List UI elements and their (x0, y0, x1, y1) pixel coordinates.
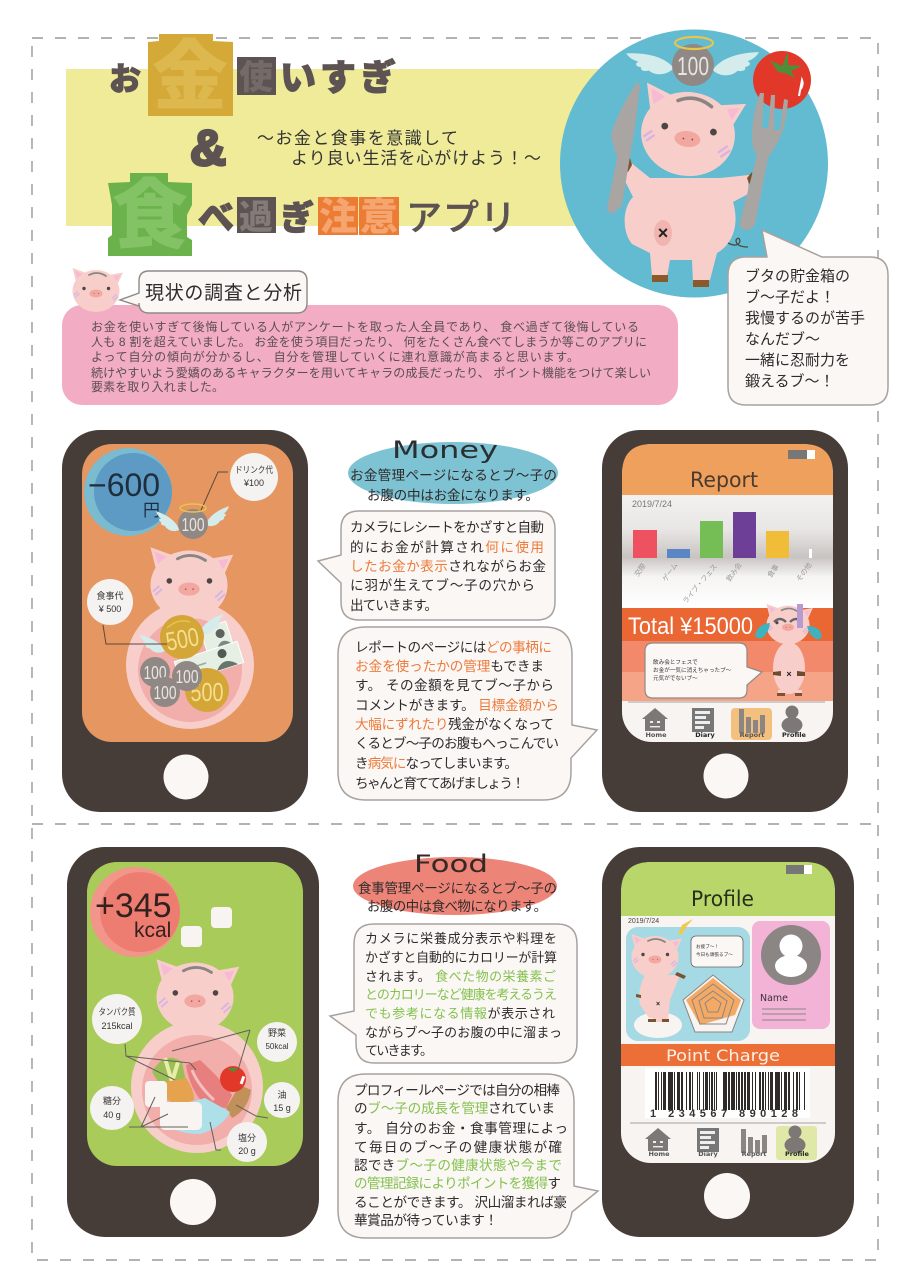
coins: 100 (144, 663, 166, 683)
bottom navigation: Home (645, 731, 667, 739)
pig comment bubble: お金が一気に消えちゃったブ〜 (653, 666, 732, 674)
callout: profile page: プロフィールページでは自分の相棒 (354, 1083, 560, 1098)
callout: sugar: 40 g (103, 1110, 121, 1120)
callout: drink: ¥100 (243, 478, 264, 488)
pig head (156, 959, 239, 1031)
pig comment bubble: 元気がでないブ〜 (653, 674, 698, 682)
title line 2: ぎ (280, 199, 314, 238)
speech bubble: mascot intro (728, 230, 888, 405)
crying pig: × (786, 669, 792, 679)
coins: 100 (154, 683, 176, 703)
title kanji: food: 食 (112, 174, 188, 259)
winged coin: 100 (677, 51, 709, 81)
counter: -600 yen: 円 (143, 496, 160, 521)
callout: profile page: す。 自分のお金・食事管理によっ (354, 1121, 568, 1136)
callout: food calculation (330, 924, 577, 1063)
subtitle: 〜お金と食事を意識して (257, 129, 458, 148)
callout: report page: コメントがきます。 目標金額から (355, 698, 559, 713)
callout: profile page: ることができます。 沢山溜まれば豪 (354, 1195, 567, 1210)
bar chart: ゲーム (660, 561, 680, 583)
callout: meal: 食事代 (96, 589, 124, 602)
food contents (145, 1058, 251, 1134)
bar chart: その他 (794, 561, 814, 583)
callout: report page: き病気になってしまいます。 (355, 756, 518, 771)
phone: profile screen (602, 847, 854, 1237)
winged coin: 100 (182, 515, 204, 535)
callout: profile page: 認できブ〜子の健康状態や今まで (354, 1157, 562, 1173)
title kanji: excess: 過 (239, 199, 273, 237)
banknotes (174, 621, 244, 683)
heading: Food: Food (414, 850, 488, 878)
callout: food calculation: でも参考になる情報が表示され (365, 1006, 555, 1021)
callout: food calculation: とのカロリーなど健康を考えるうえ (365, 987, 557, 1002)
title line 2: アプリ (406, 197, 516, 238)
callout: food calculation: カメラに栄養成分表示や料理を (365, 931, 557, 946)
winged coin (152, 504, 233, 539)
title line 2 (108, 173, 516, 259)
callout: protein (92, 994, 142, 1044)
phone: profile screen: 2019/7/24 (628, 918, 659, 925)
callout: profile page (338, 1074, 598, 1238)
mascot illustration: × (658, 223, 668, 243)
counter: +345 kcal (90, 867, 180, 957)
title kanji: use: 使 (239, 59, 273, 97)
bar chart (622, 495, 833, 608)
callout: drink (230, 453, 278, 501)
heading: Money: お腹の中はお金になります。 (367, 487, 539, 503)
heading: Money (348, 436, 558, 504)
speech bubble: mascot intro: 我慢するのが苦手 (745, 310, 865, 327)
barcode: 1 234567 890128 (650, 1108, 798, 1120)
callout: report page: ちゃんと育ててあげましょう！ (355, 776, 525, 791)
belly button (654, 220, 672, 246)
callout: vegetables (257, 1022, 297, 1062)
callout: sugar (90, 1086, 134, 1130)
callout: money calculation: カメラにレシートをかざすと自動 (350, 519, 544, 535)
bottom navigation: Profile (785, 1150, 810, 1158)
belly (131, 1021, 263, 1153)
pig feet (652, 275, 668, 282)
report header (622, 444, 833, 495)
bottom navigation: Report (742, 1150, 766, 1158)
counter: -600 yen: −600 (88, 467, 160, 503)
bar chart: 食事 (765, 563, 781, 579)
pig comment bubble (645, 643, 762, 698)
total band (622, 608, 833, 701)
bar chart: 交際 (632, 562, 648, 578)
knife (607, 82, 640, 213)
pig body (622, 162, 749, 283)
title kanji: money: 金 (152, 35, 228, 120)
bar chart: 2019/7/24 (632, 499, 672, 509)
hands (623, 158, 754, 184)
heading: Money: Money (392, 436, 498, 464)
profile header: Profile (691, 887, 754, 911)
barcode (645, 1068, 810, 1120)
heading: Food: お腹の中は食べ物になります。 (367, 898, 547, 914)
speech bubble: mascot intro: なんだブ〜 (745, 330, 820, 348)
bottom navigation: Diary (698, 1150, 718, 1158)
panel: analysis text: 要素を取り入れました。 (91, 380, 224, 394)
character panel: × (656, 1001, 660, 1008)
phone: food screen (67, 847, 319, 1237)
panel: analysis text: よって自分の傾向が分かるし、 自分を管理していくに連れ意識が高まると思います。 (91, 349, 579, 364)
character speech bubble (691, 936, 743, 967)
panel: analysis text: 続けやすいよう愛嬌のあるキャラクターを用いてキャラの成長だったり、 ポイント機能をつけて楽しい (91, 365, 651, 380)
point charge band (621, 1044, 835, 1066)
fork (740, 93, 788, 230)
callout: money calculation: したお金か表示されながらお金 (350, 559, 546, 574)
crying pig (755, 604, 822, 696)
title line 2: べ (198, 197, 234, 238)
counter: +345 kcal: kcal (134, 919, 171, 942)
callout: oil (264, 1082, 300, 1118)
callout: oil: 油 (277, 1088, 287, 1101)
bottom navigation (628, 702, 825, 740)
callout: salt: 塩分 (238, 1131, 256, 1144)
character speech bubble: お疲ブ〜！ (696, 943, 719, 950)
callout: money calculation: に羽が生えてブ〜子の穴から (350, 577, 535, 593)
winged coin (626, 37, 759, 86)
callout: vegetables: 野菜 (268, 1026, 286, 1039)
callout: money calculation: 出ていきます。 (350, 598, 438, 613)
callout: money calculation: 的にお金が計算され何に使用 (350, 539, 544, 555)
belly (126, 601, 254, 729)
subtitle (257, 129, 541, 168)
heading: Food: 食事管理ページになるとブ〜子の (358, 880, 557, 896)
callout: report page: す。 その金額を見てブ〜子から (355, 677, 554, 693)
bottom navigation: Report (740, 731, 764, 739)
leader lines (125, 1030, 268, 1150)
speech bubble: mascot intro: 鍛えるブ〜！ (745, 372, 835, 390)
speech bubble: mascot intro: ブ〜子だよ！ (745, 288, 835, 306)
callout: profile page: のブ〜子の成長を管理されていま (354, 1100, 555, 1116)
bottom navigation: Diary (695, 731, 715, 739)
callout: sugar: 糖分 (103, 1094, 121, 1107)
speech bubble: mascot intro: ブタの貯金箱の (745, 267, 850, 285)
callout: report page: お金を使ったかの管理もできま (355, 658, 544, 674)
coins (137, 614, 229, 712)
callout: drink: ドリンク代 (235, 463, 273, 476)
character speech bubble: 今日も頑張るブ〜 (696, 951, 733, 958)
leader line (103, 625, 167, 644)
bar chart: 飲み会 (724, 561, 744, 583)
pig comment bubble: 飲み会とフェスで (653, 658, 698, 666)
tail (728, 238, 748, 247)
point charge band: Point Charge (666, 1046, 780, 1065)
leader line (198, 472, 228, 517)
bar chart: ライブ・フェス (681, 562, 719, 605)
subtitle: より良い生活を心がけよう！〜 (291, 149, 541, 168)
speech bubble: mascot intro: 一緒に忍耐力を (745, 352, 850, 369)
callout: salt: 20 g (238, 1146, 256, 1156)
name card (752, 921, 830, 1029)
panel: analysis text: お金を使いすぎて後悔している人がアンケートを取った人全員であり、 食べ過ぎて後悔している (91, 319, 639, 334)
sugar cubes (181, 907, 232, 947)
panel: analysis text: 人も 8 割を超えていました。 お金を使う項目だったり、 何をたくさん食べてしまうか等このアプリに (91, 334, 647, 349)
icon: small pig (72, 268, 123, 312)
total band: Total ¥15000 (628, 613, 753, 640)
mascot illustration (560, 30, 828, 298)
callout: report page: くるとブ〜子のお腹もへっこんでい (355, 735, 559, 751)
name card: Name (760, 993, 788, 1004)
profile header (621, 862, 835, 916)
coins: 500 (163, 621, 201, 657)
callout: profile page: 華賞品が待っています！ (354, 1213, 498, 1228)
callout: report page: 大幅にずれたり残金がなくなって (355, 717, 554, 732)
yellow title band (66, 69, 606, 226)
callout: meal: ¥ 500 (98, 604, 121, 614)
blue circle (560, 30, 828, 298)
heading: Food (353, 850, 557, 915)
title line 1: お (109, 61, 141, 97)
bottom navigation: Home (648, 1150, 670, 1158)
heading: analysis: 現状の調査と分析 (145, 278, 302, 305)
callout: protein: タンパク質 (98, 1005, 136, 1018)
pig head (636, 83, 747, 182)
tomato (753, 51, 811, 109)
coins: 100 (176, 667, 198, 687)
coins: 500 (190, 677, 224, 707)
callout: profile page: て毎日のブ〜子の健康状態が確 (354, 1139, 562, 1155)
title line 1: いすぎ (280, 57, 396, 98)
title (108, 34, 541, 259)
heading: Money: お金管理ページになるとブ〜子の (350, 467, 557, 483)
report header: Report (690, 468, 758, 492)
callout: money calculation (318, 511, 555, 620)
heading: analysis (120, 271, 307, 313)
title line 1 (109, 34, 396, 120)
callout: report page (338, 627, 597, 800)
ampersand: & (190, 120, 226, 176)
callout: food calculation: ていきます。 (365, 1043, 433, 1058)
callout: profile page: の管理記録によりポイントを獲得す (354, 1175, 561, 1191)
bottom navigation: Profile (782, 731, 807, 739)
title kanji: caution: 注 (319, 197, 357, 239)
callout: salt (227, 1122, 267, 1162)
pig head (150, 547, 233, 619)
callout: food calculation: かざすと自動的にカロリーが計算 (365, 950, 557, 965)
title kanji: caution (318, 197, 399, 239)
callout: report page: レポートのページにはどの事柄に (355, 640, 552, 655)
radar chart (683, 975, 744, 1032)
title kanji: caution: 意 (360, 197, 398, 239)
panel: analysis text (62, 305, 678, 405)
callout: food calculation: ながらブ〜子のお腹の中に溜まっ (365, 1025, 562, 1040)
phone: money screen (62, 430, 308, 812)
callout: food calculation: されます。 食べた物の栄養素ご (365, 969, 556, 984)
callout: meal (87, 579, 133, 625)
phone: report screen (602, 430, 848, 812)
counter: -600 yen (84, 448, 172, 536)
bottom navigation (630, 1123, 826, 1160)
character panel (626, 919, 750, 1041)
counter: +345 kcal: +345 (95, 887, 172, 925)
callout: oil: 15 g (273, 1103, 291, 1113)
callout: vegetables: 50kcal (265, 1042, 289, 1051)
callout: protein: 215kcal (101, 1021, 133, 1031)
